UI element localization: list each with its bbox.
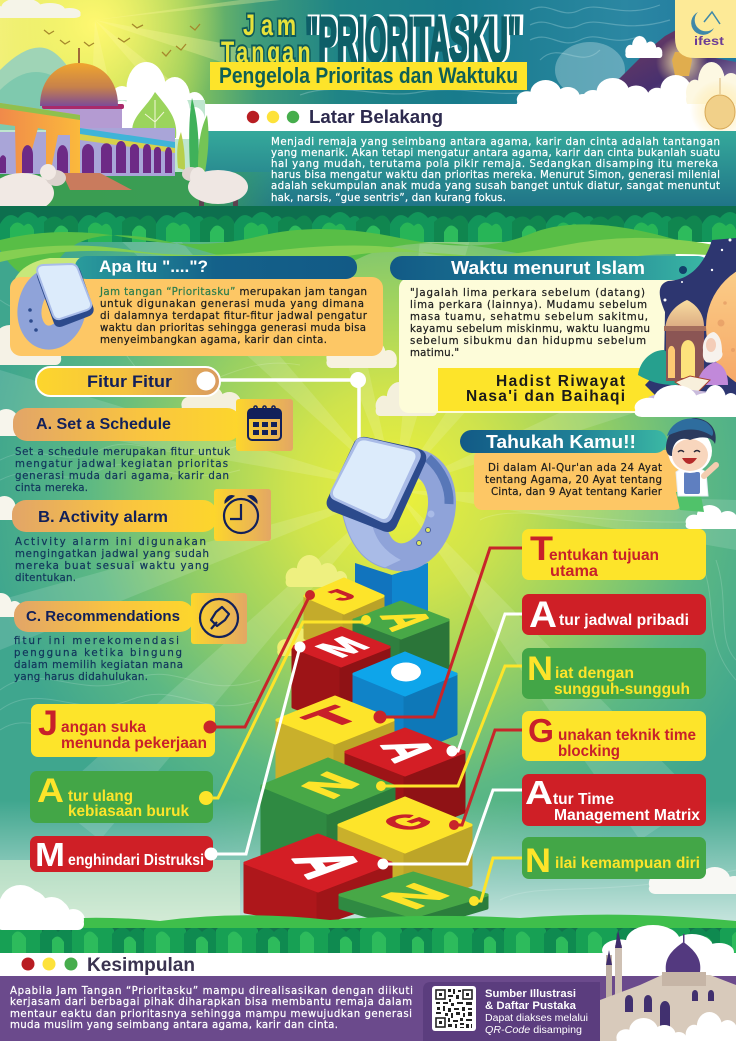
title: PRIORITASKU bbox=[305, 5, 524, 75]
card: Menghindari Distruksi: M bbox=[35, 836, 65, 873]
feature C: Recommendations bbox=[14, 593, 247, 683]
title: Jam Tangan bbox=[221, 7, 311, 69]
text block: alarm description: mereka buat sesuai waktu yang bbox=[15, 561, 209, 572]
text block: schedule description: cinta mereka. bbox=[15, 483, 88, 494]
card: Jangan suka menunda pekerjaan: menunda pekerjaan bbox=[61, 735, 207, 752]
feature B: Activity alarm: B. Activity alarm bbox=[38, 509, 168, 526]
text block: recommendations description: yang harus didahulukan. bbox=[14, 672, 148, 683]
background clouds in the middle section bbox=[0, 235, 736, 933]
text block: Latar Belakang body: hak, narsis, “gue sentris”, dan kurang fokus. bbox=[271, 193, 506, 204]
section bar: Latar Belakang bbox=[205, 104, 736, 131]
text block: schedule description: generasi muda dari agama, karir dan bbox=[15, 471, 229, 482]
text block: Apa Itu body: untuk digunakan generasi muda yang dimana bbox=[100, 299, 364, 310]
connector: N yellow line bbox=[376, 666, 528, 791]
heading: Tahukah Kamu: Tahukah Kamu!! bbox=[486, 432, 636, 452]
logo panel: ifest bbox=[694, 34, 724, 48]
callout: hadith source bbox=[438, 368, 657, 411]
connector: A white lower line bbox=[378, 790, 526, 870]
block: G: G bbox=[370, 808, 444, 836]
text block: Apa Itu body: waktu dan prioritas sehingga generasi muda bisa bbox=[100, 323, 366, 334]
text block: hadith quote: lima perkara (lainnya). Mudamu sebelum bbox=[410, 300, 647, 311]
card: Tentukan tujuan utama: entukan tujuan bbox=[549, 547, 659, 564]
heading: Waktu menurut Islam bbox=[390, 256, 710, 280]
connector: M white line bbox=[204, 642, 306, 860]
text block: Tahukah body bbox=[485, 463, 663, 498]
card: Atur ulang kebiasaan buruk: A bbox=[37, 772, 64, 810]
card: Atur ulang kebiasaan buruk: kebiasaan buruk bbox=[68, 803, 189, 820]
card: Tentukan tujuan utama: utama bbox=[550, 563, 598, 580]
text block: Apa Itu body bbox=[99, 287, 368, 346]
card: Niat dengan sungguh-sungguh bbox=[522, 648, 706, 699]
card: Jangan suka menunda pekerjaan bbox=[31, 704, 216, 757]
feature C: Recommendations: C. Recommendations bbox=[26, 608, 180, 625]
panel: Latar Belakang background bbox=[195, 131, 736, 221]
block: M: M bbox=[305, 632, 380, 662]
title: Jam Tangan: Jam bbox=[243, 7, 296, 42]
section bar: Kesimpulan bbox=[0, 953, 736, 976]
icon: sheep right bbox=[182, 167, 248, 212]
block: T bbox=[277, 697, 393, 803]
text block: Tahukah body: tentang Agama, 20 Ayat tentang bbox=[485, 475, 662, 486]
tower: stacked letter blocks bbox=[245, 563, 487, 930]
illustration: smiling boy bbox=[666, 418, 716, 512]
text block: Kesimpulan body: muda muslim yang seimbang antara agama, karir dan cinta. bbox=[10, 1020, 338, 1031]
clouds under the top banner bbox=[109, 36, 736, 122]
title: Jam Tangan: Tangan bbox=[221, 34, 311, 69]
text block: schedule description: mengatur jadwal kegiatan prioritas bbox=[15, 459, 228, 470]
feature B: Activity alarm bbox=[12, 489, 271, 584]
block: A bbox=[354, 602, 448, 698]
connector: A white line bbox=[446, 614, 531, 756]
block: T: T bbox=[292, 701, 374, 733]
card: Atur Time Management Matrix: A bbox=[525, 774, 553, 811]
connector: N yellow lower line bbox=[469, 858, 526, 906]
feature A: Set a Schedule bbox=[13, 399, 293, 494]
card: Menghindari Distruksi: enghindari Distruksi bbox=[68, 852, 204, 869]
logo panel bbox=[675, 0, 736, 58]
panel: sources with QR code: Sumber Illustrasi bbox=[485, 988, 576, 1000]
panel: sources with QR code: & Daftar Pustaka bbox=[485, 1000, 577, 1012]
text block: hadith quote: kayamu sebelum miskinmu, waktu luangmu bbox=[410, 324, 650, 335]
text block: alarm description bbox=[15, 537, 209, 584]
card: Nilai kemampuan diri bbox=[522, 837, 706, 880]
block: N: N bbox=[290, 767, 372, 804]
card: Atur jadwal pribadi bbox=[522, 594, 706, 635]
text block: recommendations description: pengguna ketika bingung bbox=[14, 648, 182, 659]
text block: Kesimpulan body: mentaur eaktu dan prioritasnya sehingga mampu mewujudkan generasi bbox=[10, 1009, 412, 1020]
card: Atur jadwal pribadi: A bbox=[529, 594, 557, 635]
card: Atur ulang kebiasaan buruk bbox=[30, 771, 213, 823]
section bar: Kesimpulan: Kesimpulan bbox=[87, 955, 195, 976]
text block: Kesimpulan body: kerjasam dari berbagai pihak diharapkan bisa membantu remaja dalam bbox=[10, 997, 412, 1008]
connector: feature line bbox=[205, 380, 359, 450]
card: Jangan suka menunda pekerjaan: J bbox=[38, 704, 58, 743]
heading: Fitur Fitur bbox=[36, 367, 366, 396]
block: J bbox=[305, 579, 383, 655]
text block: Apa Itu body: Jam tangan “Prioritasku” merupakan jam tangan bbox=[99, 287, 367, 298]
card: Gunakan teknik time blocking: unakan teknik time bbox=[558, 727, 696, 744]
heading: Tahukah Kamu bbox=[460, 430, 667, 453]
connector: T line bbox=[375, 548, 535, 722]
block: M bbox=[293, 628, 389, 726]
text block: alarm description: ditentukan. bbox=[15, 573, 76, 584]
callout: hadith source: Nasa'i dan Baihaqi bbox=[466, 388, 625, 405]
text block: Apa Itu body: di dalamnya terdapat fitur-fitur jadwal pengatur bbox=[100, 311, 368, 322]
title bbox=[210, 5, 527, 90]
text block: recommendations description bbox=[14, 636, 183, 683]
illustration: night scene with moon, kiosk and reading woman bbox=[638, 238, 736, 403]
icon: glow behind small watch bbox=[10, 258, 90, 345]
block: A: A bbox=[368, 606, 446, 635]
text block: schedule description bbox=[15, 447, 230, 494]
card: Nilai kemampuan diri: ilai kemampuan diri bbox=[555, 855, 700, 872]
block: A bbox=[346, 729, 464, 835]
connector: J line bbox=[204, 590, 315, 734]
column: blue pillar bbox=[355, 563, 428, 640]
text block: alarm description: Activity alarm ini digunakan bbox=[15, 537, 206, 548]
callout: hadith source: Hadist Riwayat bbox=[496, 373, 625, 390]
text block: Latar Belakang body: adalah sekumpulan anak muda yang susah banget untuk diatur, sangat menuntut bbox=[271, 181, 720, 192]
heading: Waktu menurut Islam: Waktu menurut Islam bbox=[451, 258, 645, 278]
text block: Kesimpulan body: Apabila Jam Tangan “Prioritasku” mampu direalisasikan dengan diikuti bbox=[10, 986, 413, 997]
lantern upper bbox=[656, 36, 708, 88]
text block: Latar Belakang body: harus bisa mengatur waktu dan prioritas mereka. Menurut Simon, generasi milenial bbox=[271, 170, 720, 181]
text block: recommendations description: dalam memilih kegiatan mana bbox=[14, 660, 183, 671]
block: A: A bbox=[275, 845, 378, 883]
subtitle bar: Pengelola Prioritas dan Waktuku bbox=[219, 63, 518, 88]
text block: hadith quote: matimu." bbox=[410, 348, 459, 359]
card: Atur Time Management Matrix: tur Time bbox=[553, 791, 614, 808]
icon: alarm clock bbox=[214, 489, 271, 541]
card: Tentukan tujuan utama: T bbox=[530, 530, 553, 568]
text block: Latar Belakang body bbox=[271, 137, 720, 204]
card: Atur Time Management Matrix: Management Matrix bbox=[554, 807, 700, 824]
text block: Tahukah body: Di dalam Al-Qur'an ada 24 Ayat bbox=[488, 463, 662, 474]
card: Nilai kemampuan diri: N bbox=[525, 842, 551, 880]
panel: Apa Itu bbox=[10, 256, 383, 356]
card: Gunakan teknik time blocking: G bbox=[528, 712, 554, 749]
heading: Apa Itu: Apa Itu "...."? bbox=[99, 257, 208, 276]
block: A: A bbox=[367, 734, 449, 766]
card: Atur jadwal pribadi: tur jadwal pribadi bbox=[559, 612, 689, 629]
lantern lower bbox=[690, 78, 736, 140]
top banner background bbox=[0, 0, 736, 135]
card: Atur Time Management Matrix bbox=[522, 774, 706, 826]
heading: Apa Itu bbox=[75, 256, 357, 279]
heading: Fitur Fitur: Fitur Fitur bbox=[87, 372, 172, 391]
text block: Tahukah body: Cinta, dan 9 Ayat tentang Karier bbox=[491, 487, 663, 498]
icon: large smartwatch bbox=[328, 437, 452, 568]
block: O bbox=[354, 653, 456, 755]
text block: schedule description: Set a schedule merupakan fitur untuk bbox=[15, 447, 230, 458]
scene: mosque with golden dome bbox=[0, 48, 290, 222]
icon: sheep left bbox=[0, 164, 66, 213]
block: J: J bbox=[315, 586, 365, 604]
card: Menghindari Distruksi bbox=[30, 836, 218, 873]
block: N: N bbox=[368, 878, 463, 914]
icon: QR code bbox=[432, 986, 476, 1031]
card: Niat dengan sungguh-sungguh: iat dengan bbox=[555, 665, 634, 682]
panel: sources with QR code: Dapat diakses melalui bbox=[485, 1013, 588, 1024]
text block: hadith quote: sebelum sibukmu dan hidupmu sebelum bbox=[410, 336, 646, 347]
icon: pin badge bbox=[191, 593, 247, 644]
text block: recommendations description: fitur ini merekomendasi bbox=[14, 636, 179, 647]
panel: Kesimpulan bbox=[0, 976, 736, 1041]
block: G bbox=[339, 798, 471, 912]
section bar: Latar Belakang: Latar Belakang bbox=[309, 107, 443, 127]
block: N bbox=[262, 759, 394, 888]
connector: G red line bbox=[449, 730, 528, 830]
feature A: Set a Schedule: A. Set a Schedule bbox=[36, 416, 171, 433]
card: Atur ulang kebiasaan buruk: tur ulang bbox=[68, 788, 133, 805]
panel: sources with QR code bbox=[423, 982, 600, 1041]
panel: Tahukah Kamu bbox=[460, 430, 682, 510]
card: Tentukan tujuan utama bbox=[522, 529, 706, 580]
block: A bbox=[245, 835, 391, 925]
text block: Latar Belakang body: hal yang mudah, terutama pola pikir remaja. Sedangkan disamping itu mereka bbox=[271, 159, 718, 170]
card: Gunakan teknik time blocking bbox=[522, 711, 706, 761]
panel: Waktu menurut Islam bbox=[390, 256, 710, 413]
trees and hills upper band bbox=[0, 206, 736, 277]
text block: Apa Itu body: menyeimbangkan agama, karir dan cinta. bbox=[100, 335, 327, 346]
card: Gunakan teknik time blocking: blocking bbox=[558, 743, 620, 760]
clouds around the night scene bbox=[635, 385, 736, 417]
card: Jangan suka menunda pekerjaan: angan suka bbox=[61, 719, 146, 736]
text block: hadith quote bbox=[410, 288, 650, 359]
icon: small smartwatch bbox=[23, 264, 93, 342]
text block: hadith quote: "Jagalah lima perkara sebelum (datang) bbox=[410, 288, 645, 299]
text block: Latar Belakang body: yang menarik. Akan tetapi mengatur antara agama, karir dan cinta bukanlah suatu bbox=[271, 148, 720, 159]
clouds near the bottom bbox=[0, 890, 84, 930]
text block: Kesimpulan body bbox=[10, 986, 413, 1031]
illustration: purple-domed mosque bbox=[600, 925, 736, 1041]
card: Niat dengan sungguh-sungguh: N bbox=[527, 650, 553, 688]
icon: calendar bbox=[236, 399, 293, 451]
card: Niat dengan sungguh-sungguh: sungguh-sungguh bbox=[554, 681, 690, 698]
text block: alarm description: mengingatkan jadwal yang sudah bbox=[15, 549, 209, 560]
trees and hills lower band bbox=[0, 915, 736, 960]
text block: Latar Belakang body: Menjadi remaja yang seimbang antara agama, karir dan cinta adalah tantangan bbox=[271, 137, 720, 148]
mountain bbox=[585, 30, 736, 105]
connector: A yellow line bbox=[199, 615, 371, 805]
block: N bbox=[340, 873, 487, 930]
panel: sources with QR code: QR-Code disamping bbox=[485, 1025, 582, 1036]
background: green and yellow sunburst bbox=[0, 235, 736, 960]
text block: hadith quote: masa tuamu, sehatmu sebelum sakitmu, bbox=[410, 312, 648, 323]
